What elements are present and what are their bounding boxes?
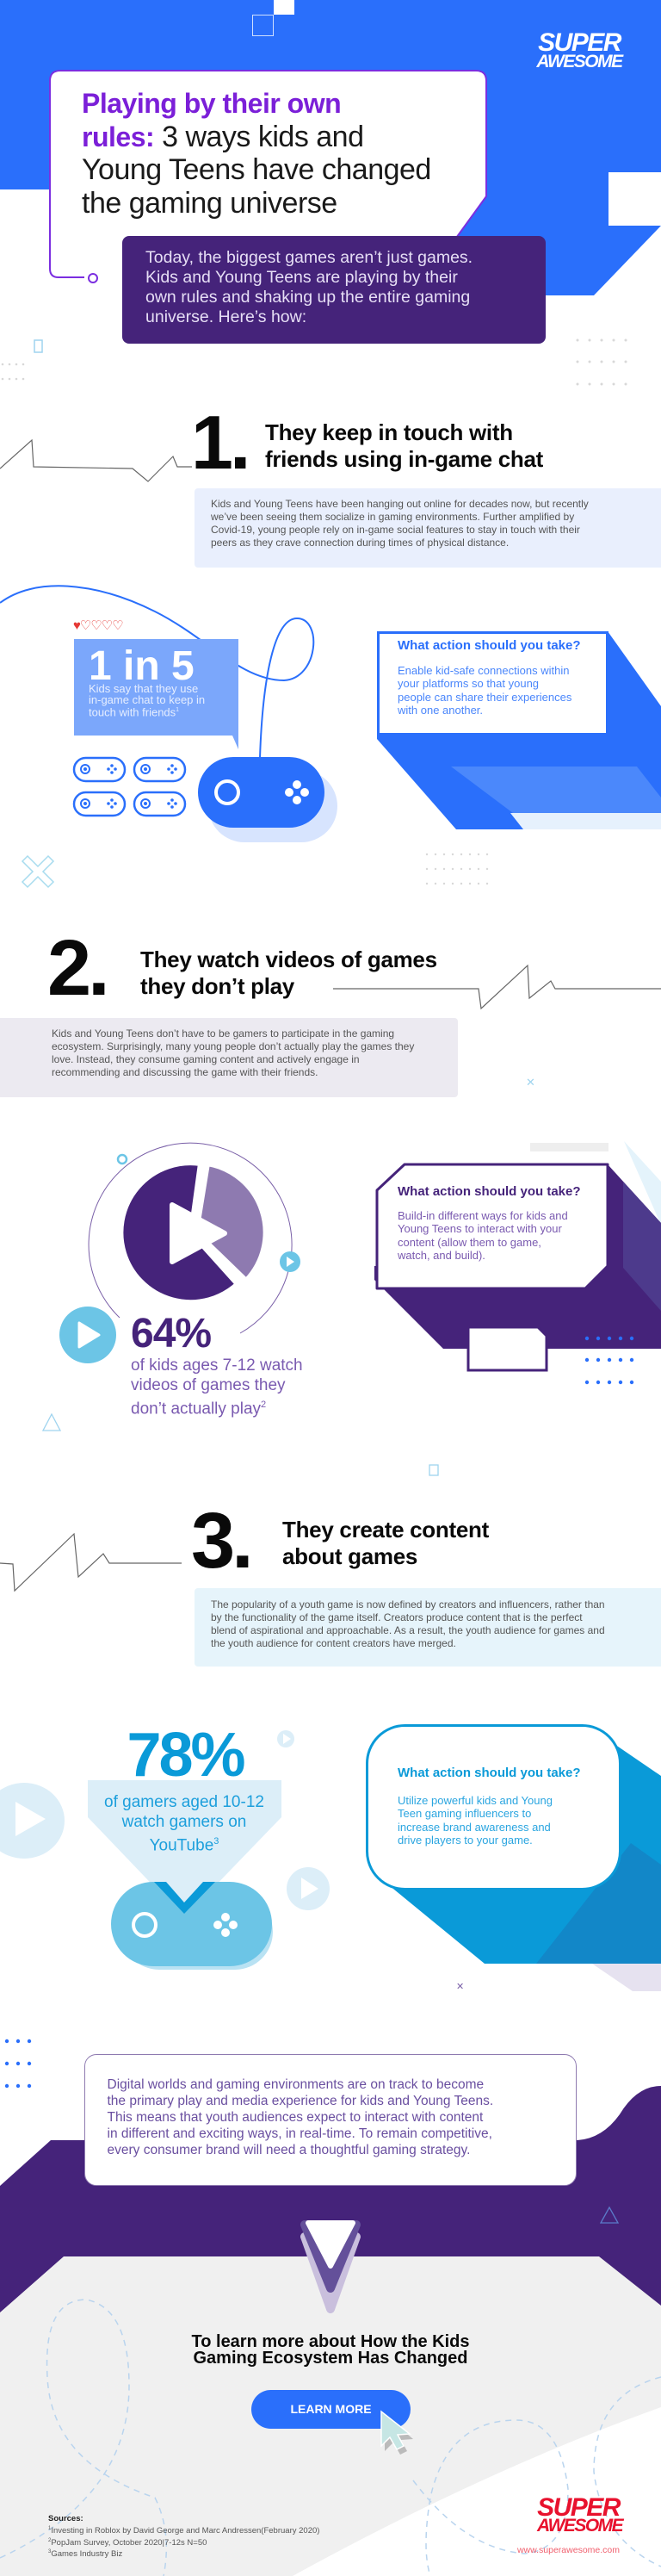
section 3 heading — [282, 1517, 489, 1569]
section 2 text box: love. Instead, they consume gaming content and actively engage in — [52, 1053, 360, 1065]
stat: 64% — [131, 1311, 303, 1418]
action panel 2: Build-in different ways for kids and — [398, 1209, 568, 1222]
logo: SuperAwesome red with url: AWESOME — [537, 2516, 622, 2536]
learn more button — [251, 2390, 411, 2429]
action panel 1 — [377, 631, 661, 829]
call to action heading: Gaming Ecosystem Has Changed — [193, 2349, 467, 2368]
decor: x icon and dots — [22, 853, 489, 888]
section 2 text box: ecosystem. Surprisingly, many young people don’t actually play the games they — [52, 1040, 414, 1052]
section 3 heading: about games — [282, 1543, 417, 1569]
action panel 1: your platforms so that young — [398, 677, 539, 690]
section 3 heading: They create content — [282, 1517, 489, 1542]
section 1 heading: friends using in-game chat — [265, 446, 543, 472]
section 3 number: 3. — [191, 1497, 250, 1585]
closing statement box: every consumer brand will need a thoughtful gaming strategy. — [107, 2143, 470, 2157]
action panel 1: Enable kid-safe connections within — [398, 664, 569, 677]
section 2 heading: they don’t play — [140, 973, 294, 999]
intro box: Kids and Young Teens are playing by their — [145, 267, 458, 286]
stat: 1 in 5: Kids say that they use — [89, 682, 198, 695]
call to action heading: To learn more about How the Kids — [191, 2332, 470, 2351]
icon: hearts: ♥♡♡♡♡ — [73, 618, 123, 633]
icon: big controller — [198, 757, 337, 842]
stat: 64%: don’t actually play2 — [131, 1400, 266, 1418]
section 3 text box: The popularity of a youth game is now defined by creators and influencers, rather than — [211, 1598, 605, 1611]
section 1 text box: Kids and Young Teens have been hanging out online for decades now, but recently — [211, 498, 589, 510]
closing statement box: This means that youth audiences expect to interact with content — [107, 2110, 483, 2124]
stat: 78% funnel: 78% — [127, 1721, 244, 1790]
logo: SuperAwesome white: AWESOME — [536, 52, 622, 71]
stat: 1 in 5 — [74, 639, 238, 749]
pie chart with play icon — [88, 1142, 300, 1333]
stat: 64%: videos of games they — [131, 1376, 286, 1394]
sources — [48, 2514, 319, 2560]
small x icon: ✕ — [526, 1076, 535, 1089]
icon: cursor — [380, 2410, 413, 2455]
action panel 3: Utilize powerful kids and Young — [398, 1794, 553, 1807]
section 2 heading: They watch videos of games — [140, 947, 437, 972]
title: Young Teens have changed — [82, 153, 431, 186]
section 3 text box — [195, 1588, 661, 1667]
title: Playing by their own — [82, 88, 341, 119]
title: the gaming universe — [82, 186, 337, 219]
arrow: down triangle — [300, 2220, 361, 2313]
action panel 1: with one another. — [398, 704, 483, 717]
section 2 zigzag — [333, 965, 661, 1009]
action panel 2: What action should you take? — [398, 1184, 581, 1199]
section 1 heading: They keep in touch with — [265, 419, 513, 445]
section 1 heading — [265, 419, 543, 472]
action panel 2: Young Teens to interact with your — [398, 1222, 562, 1235]
section 2 text box: recommending and discussing the game with their friends. — [52, 1066, 318, 1078]
stat: 78% funnel: watch gamers on — [122, 1813, 246, 1831]
action panel 3: increase brand awareness and — [398, 1821, 551, 1834]
closing statement box: Digital worlds and gaming environments are on track to become — [107, 2077, 484, 2091]
learn more button: LEARN MORE — [290, 2402, 372, 2416]
small square outline — [429, 1464, 439, 1476]
stat: 1 in 5: in-game chat to keep in — [89, 693, 205, 706]
play circles decor — [0, 1730, 330, 1910]
closing statement box: the primary play and media experience for kids and Young Teens. — [107, 2093, 493, 2108]
stat: 1 in 5: 1 in 5 — [89, 643, 195, 689]
section 2 text box: Kids and Young Teens don’t have to be gamers to participate in the gaming — [52, 1027, 394, 1039]
icon: big play circle — [59, 1307, 116, 1363]
logo: SuperAwesome white: SUPER — [538, 28, 621, 57]
blue dots row — [585, 1380, 633, 1385]
closing statement box — [84, 2054, 577, 2186]
section 1 text box: peers as they crave connection during times of physical distance. — [211, 537, 509, 549]
section 2 number: 2. — [47, 924, 107, 1012]
sources: 3Games Industry Biz — [48, 2549, 122, 2560]
small x: ✕ — [456, 1982, 464, 1992]
section 1 zigzag — [0, 439, 192, 482]
stat: 1 in 5: touch with friends1 — [89, 706, 179, 719]
section 3 text box: the youth audience for content creators have merged. — [211, 1637, 456, 1649]
triangle outline — [42, 1412, 61, 1431]
stat: 78% funnel — [88, 1721, 281, 1883]
logo: SuperAwesome red with url — [517, 2493, 625, 2555]
section 2 text box — [0, 1018, 458, 1097]
action panel 2: content (allow them to game, — [398, 1236, 541, 1249]
action panel 3 — [366, 1724, 661, 1991]
title: rules: 3 ways kids and — [82, 121, 363, 153]
blue dots left — [5, 2039, 31, 2088]
stat: 78% funnel: YouTube3 — [150, 1836, 219, 1854]
section 3 zigzag — [0, 1533, 182, 1592]
intro box: universe. Here’s how: — [145, 307, 306, 326]
logo: SuperAwesome red with url: SUPER — [537, 2493, 620, 2522]
action panel 3: drive players to your game. — [398, 1834, 533, 1847]
action panel 2: watch, and build). — [398, 1249, 485, 1262]
icon: light blue controller — [111, 1882, 273, 1970]
decor dots header — [2, 339, 627, 386]
stat: 78% funnel: of gamers aged 10-12 — [104, 1793, 264, 1811]
sources: Sources: — [48, 2514, 83, 2523]
bottom background — [0, 2086, 661, 2576]
title — [82, 88, 431, 219]
action panel 3: Teen gaming influencers to — [398, 1807, 531, 1820]
section 1 text box: Covid-19, young people rely on in-game social features to stay in touch with their — [211, 524, 580, 536]
intro box: own rules and shaking up the entire gaming — [145, 288, 470, 307]
action panel 1: people can share their experiences — [398, 691, 571, 704]
intro box — [122, 236, 546, 344]
section 1 text box: we’ve been seeing them socialize in gaming environments. Further amplified by — [211, 511, 574, 523]
intro box: Today, the biggest games aren’t just games. — [145, 248, 473, 267]
section 3 text box: blend of aspirational and approachable. As a result, the youth audience for games and — [211, 1624, 605, 1636]
section 2 heading — [140, 947, 437, 999]
action panel 1: What action should you take? — [398, 638, 581, 653]
icon: small controllers grid — [72, 756, 186, 816]
closing statement box: in different and exciting ways, in real-time. To remain competitive, — [107, 2126, 492, 2141]
header background — [0, 0, 661, 295]
action panel 3: What action should you take? — [398, 1766, 581, 1780]
logo: SuperAwesome white — [536, 28, 624, 71]
call to action heading — [191, 2332, 470, 2368]
sources: 1Investing in Roblox by David George and Marc Andressen(February 2020) — [48, 2526, 319, 2536]
stat: 64%: 64% — [131, 1311, 211, 1356]
action panel 2 — [374, 1142, 661, 1371]
section 1 number: 1. — [191, 400, 247, 485]
sources: 2PopJam Survey, October 2020|7-12s N=50 — [48, 2538, 207, 2548]
section 3 text box: by the functionality of the game itself. Creators produce content that is the perfect — [211, 1611, 583, 1623]
logo: SuperAwesome red with url: www.superawesome.com — [517, 2545, 620, 2555]
stat: 64%: of kids ages 7-12 watch — [131, 1356, 303, 1375]
title card — [49, 70, 487, 283]
blue cable curve — [0, 585, 315, 757]
section 1 text box — [195, 488, 661, 568]
